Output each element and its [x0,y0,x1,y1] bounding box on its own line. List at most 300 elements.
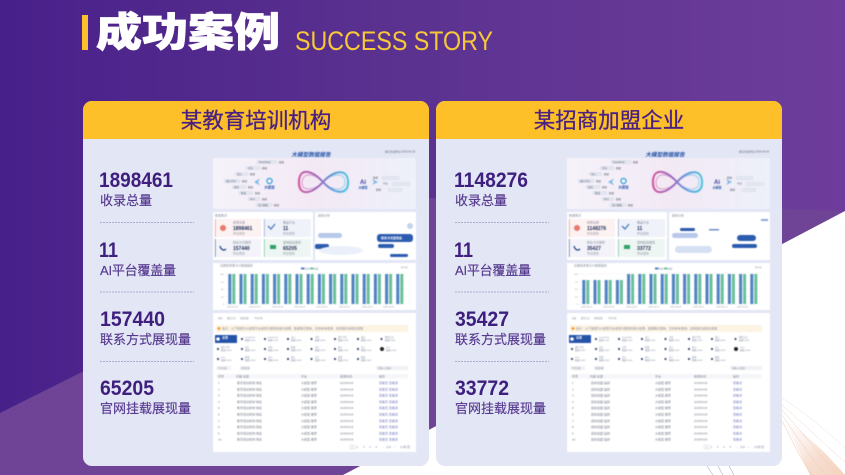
pagination: … [381,445,384,449]
source labels: 百川智能 [258,203,269,207]
platform tabs: 数据12345 [622,338,633,342]
platform tabs: 数据12345 [575,358,586,362]
platform tabs: 数据12345 [291,358,302,362]
stat tile: contact [569,239,615,257]
table rows: 查看详 [733,399,742,404]
table rows: 大模型 推荐 [655,399,671,404]
pagination: 100 [386,445,391,449]
platform tabs: 全部 [222,334,228,340]
table rows: 2025/6/18 [340,387,354,391]
platform tabs: 数据12345 [221,358,232,362]
platform tabs: 天工 [315,356,320,359]
platform tabs: 秘塔 [338,355,343,359]
stat tile: platforms [264,219,311,237]
table rows: 教育培训机构”排名 [237,399,262,404]
platform tabs: 智谱 [599,355,604,359]
table rows: 教育培训机构”排名 [237,424,262,429]
platform tabs: 文心 [645,335,650,339]
stats card: 数据概况 [569,212,581,218]
table rows: 大模型 推荐 [655,380,671,385]
table filters: 全部分类 [241,366,251,370]
table rows: 2 [572,387,574,391]
table rows: 大模型 推荐 [301,405,317,410]
pagination: 4 [723,445,725,449]
axis labels: 2025-06-05 [626,306,638,308]
source labels: 通义千问 [226,179,237,183]
table filters: 全部分类 [595,366,605,370]
stat tile: contact: 联系方式展现 [587,240,605,244]
table rows: 2025/6/18 [340,431,354,435]
platform tabs: 数据12345 [221,348,232,352]
table rows: 大模型 推荐 [655,437,671,442]
pagination: 3 [717,445,719,449]
table rows: 查看页 查看源 [379,386,398,391]
platform tabs: 星火 [291,355,296,359]
platform tabs: 数据12345 [315,358,326,362]
axis labels: 2025-06-03 [249,306,261,308]
source labels: 数据 [376,188,382,192]
source pills [578,160,764,206]
card header [436,101,782,139]
metric: contact impressions: 157440 [100,308,165,331]
platform tabs: 数据12345 [315,348,326,352]
stat tile: website: 65205 [283,246,297,252]
table rows: 招商加盟”品牌 [591,437,610,442]
table rows: 2025/6/18 [340,412,354,416]
background: lighter purple wedge [0,198,845,475]
subtitle: SUCCESS STORY: SUCCESS STORY [295,26,493,56]
table rows: 2025/6/18 [694,400,708,404]
tabs: 联系方式 [581,316,591,320]
platform tabs: 文心 [245,345,250,349]
platform tabs: 星火 [692,345,697,349]
table header: 操作 [733,373,739,378]
axis labels: 100 [220,274,224,276]
axis labels: 2025-06-01 [227,306,239,308]
platform tabs: DeepSeek [268,337,279,339]
axis labels: 0 [577,304,579,306]
platform tabs: DeepSeek [245,337,256,339]
infinity loop icon [652,172,703,193]
platform tabs: 豆包 [315,335,320,339]
table rows: 大模型 推荐 [655,386,671,391]
metric: AI platforms: AI平台覆盖量 [100,263,176,278]
metric: website impressions: 65205 [100,377,154,400]
stat tile: platforms: 覆盖平台 [637,220,649,224]
stat tile: platforms: 环比增长 [283,230,295,236]
source labels: 混元 [234,185,240,189]
pagination: 10条/页 [754,444,764,449]
chart legend: 收录 [305,266,310,270]
platform tabs: 数据12345 [669,338,680,342]
table rows: 大模型 推荐 [655,418,671,423]
table rows: 教育培训机构”排名 [237,430,262,435]
axis labels: 50 [575,289,578,291]
tabs: 平台分布 [608,316,618,320]
platform tabs: 数据12345 [669,358,680,362]
platform tabs: 数据12345 [599,358,610,362]
table rows: 查看详 [733,405,742,410]
platform tabs: 纳米 [361,355,366,359]
table rows: 查看详 [733,430,742,435]
table rows: 查看页 查看源 [379,380,398,385]
table rows: 大模型 推荐 [301,399,317,404]
source labels [580,160,743,207]
source labels: 数据 [262,166,268,170]
stat tile: indexed [215,219,261,237]
table rows: 3 [218,394,220,398]
sentiment card: 联系方式展现量 [381,235,402,240]
platform tabs: 数据12345 [622,348,633,352]
chart legend: 展现 [314,266,319,270]
pagination: › [748,445,749,449]
data table card [567,313,770,452]
notice strip: 提示：以下数据为大模型平台收录与展现的统计结果，数据每日更新，仅供参考使用，如有疑问请联系客服 [222,326,363,330]
metric: indexed total: 1148276 [454,169,528,192]
platform tabs: 数据12345 [291,338,302,342]
background: white lower right corner [343,211,845,475]
table rows: 1 [572,381,574,385]
right brand logo [712,179,732,190]
table rows: 2 [218,387,220,391]
platform tabs: 百川 [315,345,319,349]
platform tabs: 数据12345 [669,348,680,352]
stat tile: platforms: 11 [637,226,643,232]
platform tabs: 数据12345 [268,348,279,352]
pagination [704,444,764,449]
right brand logo [358,179,378,190]
table rows: 6 [572,412,574,416]
platform tabs: 豆包 [268,345,273,349]
platform tabs: 数据12345 [575,348,586,352]
table filters: 平台分类 [572,366,582,370]
pagination: 10条/页 [400,444,410,449]
pagination: 1 [352,445,354,449]
card header [83,101,429,139]
source labels: 文心 [591,172,597,176]
table rows: 查看页 查看源 [379,424,398,429]
table header: 收录时间 [694,373,706,378]
card body [436,101,782,466]
axis labels: 2025-06-07 [648,306,660,308]
chart legend [301,266,319,270]
platform tabs: 数据12345 [715,338,726,342]
table rows: 招商加盟”品牌 [591,430,610,435]
source labels: 数据 [604,172,610,176]
source labels: 数据 [373,176,379,180]
metric: website impressions [455,377,546,416]
pagination: 3 [363,445,365,449]
platform tabs: 通义千问 [692,335,701,339]
table rows: 2025/6/18 [694,412,708,416]
table filters: 请输入关键词 [732,366,745,370]
table rows: 教育培训机构”排名 [237,386,262,391]
platform tabs: 数据12345 [291,348,302,352]
platform tabs: 数据12345 [692,338,703,342]
table rows: 1 [218,381,220,385]
table header: 收录时间 [340,373,352,378]
metric: website impressions: 33772 [455,377,509,400]
platform tabs: 数据12345 [245,338,256,342]
platform tabs: Kimi [740,347,745,349]
card body [83,101,429,466]
metric: AI platforms: 11 [99,239,118,262]
axis labels: 2025-06-11 [339,306,351,308]
table rows: 大模型 推荐 [655,430,671,435]
axis labels: 75 [575,282,578,284]
axis labels: 近30天 [401,265,409,269]
notice strip: 提示：以下数据为大模型平台收录与展现的统计结果，数据每日更新，仅供参考使用，如有疑问请联系客服 [576,326,717,330]
axis labels [220,265,409,308]
source labels: 数据 [609,191,615,195]
stat tile: website: 官网挂载展现 [637,240,655,244]
stats card [213,212,313,260]
table rows: 查看页 查看源 [379,430,398,435]
platform tabs: 腾讯元宝 [385,335,395,339]
stat tile: website: 环比增长 [637,250,649,256]
source labels: 数据 [596,179,602,183]
metric: AI platforms [454,239,531,278]
source labels: 数据 [262,197,268,201]
table rows: 2025/6/18 [694,431,708,435]
axis labels: 50 [221,289,224,291]
table rows: 教育培训机构”排名 [237,418,262,423]
table rows: 2025/6/18 [340,419,354,423]
table filters [216,366,408,370]
pagination: 2 [356,445,358,449]
platform tabs: 混元 [715,335,720,339]
table rows: 招商加盟”品牌 [591,380,610,385]
metric: AI platforms: AI平台覆盖量 [455,263,531,278]
stat tile: contact [215,239,261,257]
source labels: 数据 [279,160,285,164]
platform tabs: 数据12345 [361,338,372,342]
platform tabs: 数据12345 [361,348,372,352]
pagination: 4 [369,445,371,449]
bar chart: daily data [213,262,416,310]
sentiment card [669,212,770,260]
table rows: 6 [218,412,220,416]
axis labels: 2025-06-01 [581,306,593,308]
platform tabs: 数据12345 [361,358,372,362]
table rows: 2025/6/18 [340,394,354,398]
axis labels: 2025-06-07 [294,306,306,308]
axis labels: 2025-06-13 [362,306,374,308]
stat tile: platforms: 环比增长 [637,230,649,236]
table rows: 查看页 查看源 [379,418,398,423]
tabs: 官网挂载 [240,316,250,320]
table rows: 2025/6/18 [694,425,708,429]
stat tile: indexed: 环比增长 [233,230,245,236]
table rows: 大模型 推荐 [655,412,671,416]
source labels: 数据 [602,185,608,189]
axis labels: 2025-06-09 [670,306,682,308]
table filters: 请输入关键词 [378,366,391,370]
table rows: 招商加盟”品牌 [591,424,610,429]
table rows: 7 [218,419,220,423]
stat tile: website: 33772 [637,246,651,252]
stat tile: contact: 157440 [233,246,250,252]
metric: AI platforms [99,239,176,278]
metric: indexed total: 1898461 [99,169,173,192]
platform tabs: 百川 [268,355,272,359]
pagination: 5 [730,445,732,449]
table rows: 教育培训机构”排名 [237,412,262,416]
pagination: 2 [710,445,712,449]
stat tile: website [264,239,311,257]
platform tabs: 数据12345 [645,338,656,342]
source labels: 数据 [633,160,639,164]
table header [216,373,408,378]
metric: contact impressions: 联系方式展现量 [100,332,191,347]
heading: 某招商加盟企业 [534,104,684,135]
table rows: 招商加盟”品牌 [591,412,610,416]
table rows: 查看页 查看源 [379,437,398,442]
bars [228,274,403,304]
source labels: 数据 [730,188,736,192]
axis labels: 2025-06-15 [737,306,749,308]
pagination: › [394,445,395,449]
report meta: 报告生成时间 2025-06-18 [385,150,416,154]
table rows: 8 [572,425,574,429]
table filters [570,366,762,370]
right brand logo: Ai [714,180,720,186]
table rows: 查看详 [733,386,742,391]
axis labels: 75 [221,282,224,284]
tabs: 官网挂载 [594,316,604,320]
table filters: 平台分类 [218,366,228,370]
source labels: 智谱 [241,191,247,195]
source labels: 数据 [616,197,622,201]
platform tabs: 文心 [599,345,604,349]
axis labels: 25 [221,297,224,299]
table rows: 大模型 推荐 [301,412,317,416]
platform tabs: 全部 [576,334,582,340]
panel: franchise client [436,101,782,466]
platform tabs: 数据12345 [692,358,703,362]
metric: contact impressions [100,308,191,347]
platform tabs: 数据12345 [386,348,397,352]
source labels: 数据 [242,179,248,183]
table rows: 2025/6/18 [694,387,708,391]
chart legend [655,266,673,270]
axis labels: 2025-06-13 [716,306,728,308]
table header: 平台 [301,373,307,378]
table rows: 2025/6/18 [340,400,354,404]
table rows: 大模型 推荐 [301,380,317,385]
table rows: 招商加盟”品牌 [591,393,610,398]
stat tile: indexed: 收录总量 [233,220,245,224]
right brand logo: 大模型 [358,184,368,190]
metric: indexed total: 收录总量 [455,193,507,208]
table rows: 查看详 [733,437,742,442]
report title: 大模型数据报告 [291,152,331,158]
metric: contact impressions: 35427 [455,308,509,331]
left brand logo [254,178,275,190]
table rows: 大模型 推荐 [301,430,317,435]
left brand logo: 大模型 [264,184,275,190]
platform tabs: 数据12345 [315,338,326,342]
right brand logo: Ai [360,180,366,186]
pagination: 1 [706,445,708,449]
table header: 平台 [655,373,661,378]
platform tabs: 星火 [645,355,650,359]
table rows: 2025/6/18 [694,406,708,410]
table rows: 5 [572,406,574,410]
axis labels: 0 [223,304,225,306]
table rows: 查看详 [733,424,742,429]
platform tabs: 数据12345 [740,348,751,352]
table rows: 招商加盟”品牌 [591,386,610,391]
table rows: 10 [572,438,576,442]
decoration: bottom right wave lines [707,398,845,475]
platform tabs: 天工 [715,346,720,349]
source labels: 数据 [250,172,256,176]
sentiment card [315,212,416,260]
stat tile: indexed [569,219,615,237]
platform tabs: 数据12345 [692,348,703,352]
platform tabs: Kimi [386,347,391,349]
platform tabs: 数据12345 [245,358,256,362]
table rows: 招商加盟”品牌 [591,399,610,404]
source labels: 数据 [628,203,634,207]
sentiment card: 舆情分析 [318,212,330,218]
platform tabs: 数据12345 [599,338,610,342]
table rows [218,380,398,442]
table rows: 查看页 查看源 [379,399,398,404]
source labels: 数据 [255,191,261,195]
table rows: 大模型 推荐 [301,386,317,391]
table header: 序号 [218,373,224,378]
platform tabs: 纳米 [715,355,720,359]
stat tile: indexed: 1148276 [587,226,606,232]
source labels: 文心 [237,172,243,176]
axis labels: 25 [575,297,578,299]
platform tabs: Kimi [575,357,580,359]
table rows: 大模型 推荐 [655,424,671,429]
source labels: Kimi [250,198,255,201]
stat tile: platforms: 11 [283,226,289,232]
title: 成功案例: 成功案例 [96,0,280,58]
tabs [218,316,264,320]
stats card [567,212,667,260]
axis labels: 100 [574,274,578,276]
table rows: 查看详 [733,412,742,416]
bar chart: daily data: 近期收录量与AI数据趋势 [574,262,607,268]
infinity loop icon [298,172,349,193]
source pills [224,160,410,206]
platform tabs: 文心 [291,335,296,339]
table rows: 2025/6/18 [340,406,354,410]
source labels: 通义千问 [580,179,591,183]
sentiment card: 舆情分析 [672,212,684,218]
source labels: 平台 [737,182,743,186]
data table card [213,313,416,452]
table rows: 大模型 推荐 [301,437,317,442]
platform tabs: 智谱 [645,345,650,349]
stat tile: website: 官网挂载展现 [283,240,301,244]
table rows: 大模型 推荐 [301,393,317,398]
stat tile: contact: 环比增长 [233,250,245,256]
source labels [226,160,389,207]
axis labels: 2025-06-03 [603,306,615,308]
table rows: 4 [572,400,574,404]
platform tabs [569,334,751,362]
metric: contact impressions: 联系方式展现量 [455,332,546,347]
bar chart: daily data [567,262,770,310]
platform tabs: 数据12345 [385,338,396,342]
table rows: 查看页 查看源 [379,412,398,416]
